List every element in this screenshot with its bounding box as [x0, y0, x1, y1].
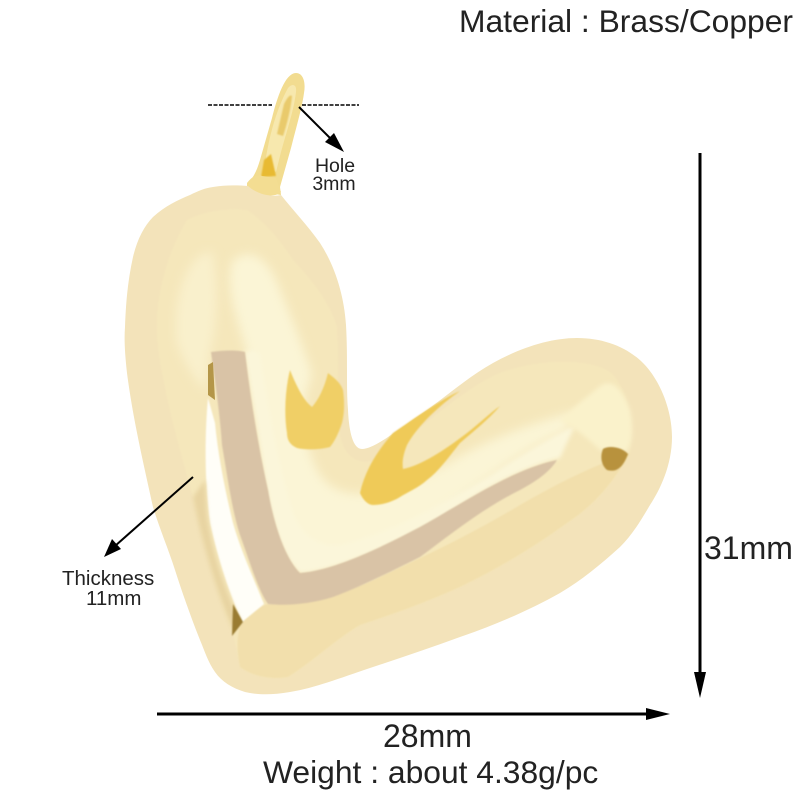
pale band beside taupe	[245, 350, 575, 573]
pendant loop	[247, 73, 305, 213]
label: hole: Hole	[315, 155, 355, 177]
label: 11mm: 11mm	[86, 587, 141, 610]
heart body	[125, 185, 672, 694]
width dimension arrow	[157, 708, 670, 720]
arrow: hole	[299, 107, 344, 152]
material label: Material : Brass/Copper	[459, 3, 793, 39]
heart pendant	[125, 185, 672, 694]
weight label: Weight : about 4.38g/pc	[263, 754, 598, 790]
right lobe highlight	[560, 383, 632, 452]
lower tier	[238, 453, 630, 678]
white reflection	[206, 398, 264, 622]
gold flash left	[285, 370, 344, 449]
label: 3mm: 3mm	[312, 173, 356, 195]
gold flash right	[360, 391, 500, 505]
arrow: thickness	[104, 477, 193, 557]
taupe reflection band	[211, 350, 557, 605]
pale arm highlight	[230, 254, 575, 570]
label: thickness: Thickness	[62, 567, 154, 590]
dashed line	[208, 104, 272, 106]
inner lobe	[157, 209, 631, 678]
left arm soft highlight	[176, 252, 216, 390]
height dimension arrow	[694, 153, 706, 698]
dark speculars	[601, 447, 628, 471]
height label: 31mm	[704, 530, 793, 566]
thin taupe left edge	[193, 480, 240, 630]
thickness measurement	[62, 477, 193, 610]
hole measurement	[208, 105, 359, 195]
width label: 28mm	[383, 718, 472, 754]
